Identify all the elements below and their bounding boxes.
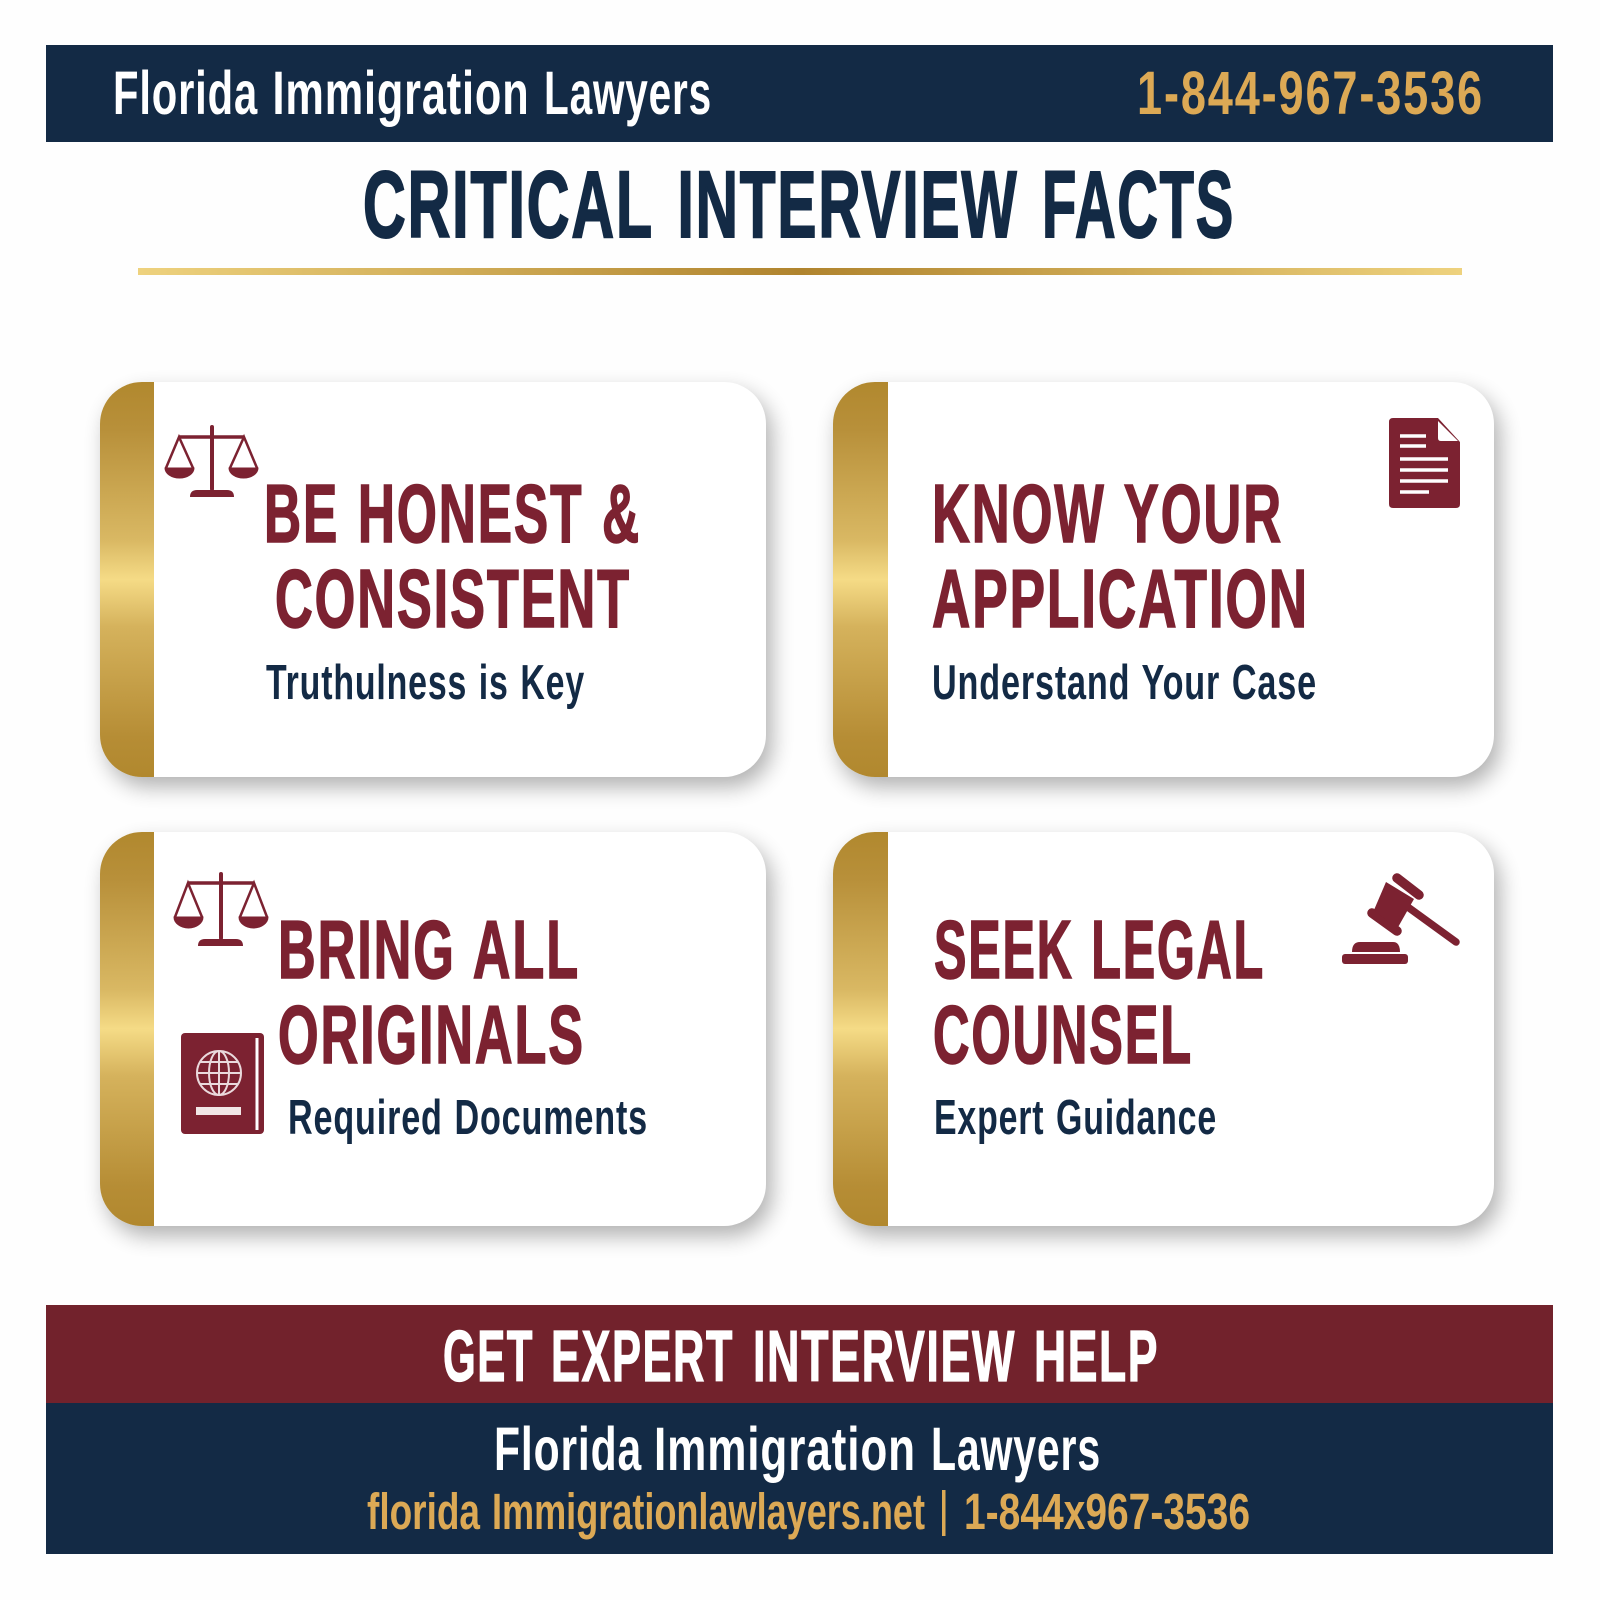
heading line 2: COUNSEL xyxy=(933,988,1193,1081)
footer website xyxy=(367,1483,925,1540)
heading: SEEK LEGAL xyxy=(934,903,1265,996)
footer phone: 1-844x967-3536 xyxy=(964,1483,1250,1540)
heading: KNOW YOUR xyxy=(932,467,1283,560)
header firm name: Lawyers xyxy=(544,59,712,127)
icon: gavel xyxy=(1342,878,1456,964)
panel: know your application xyxy=(833,382,1500,787)
footer bar xyxy=(46,1403,1553,1554)
header firm name: Immigration xyxy=(272,59,530,127)
icon: scales of justice xyxy=(174,872,268,946)
icon: document xyxy=(1389,418,1460,508)
panel: be honest and consistent xyxy=(100,382,772,787)
footer firm name xyxy=(494,1415,1101,1483)
footer firm name: Florida xyxy=(494,1415,642,1483)
icon: scales of justice xyxy=(165,425,258,497)
heading line 2: APPLICATION xyxy=(932,552,1309,645)
icon: passport xyxy=(181,1033,264,1134)
heading: BRING ALL xyxy=(278,903,580,996)
heading line 2: CONSISTENT xyxy=(275,552,631,645)
heading: BE HONEST & xyxy=(264,467,641,560)
header firm name: Florida xyxy=(113,59,258,127)
footer website: florida xyxy=(367,1483,480,1540)
header bar xyxy=(46,45,1553,142)
title: INTERVIEW xyxy=(678,152,1018,258)
panel: bring all originals xyxy=(100,832,772,1236)
heading line 2: ORIGINALS xyxy=(278,988,585,1081)
footer website: Immigrationlawlayers.net xyxy=(492,1483,925,1540)
panel: seek legal counsel xyxy=(833,832,1500,1236)
footer firm name: Lawyers xyxy=(931,1415,1101,1483)
title: CRITICAL xyxy=(363,152,654,258)
title xyxy=(363,152,1235,258)
subheading: Truthulness is Key xyxy=(266,656,585,710)
header phone number: 1-844-967-3536 xyxy=(1137,59,1484,127)
title gold rule xyxy=(138,268,1462,275)
footer divider xyxy=(942,1490,946,1536)
call to action text: INTERVIEW xyxy=(753,1317,1016,1397)
subheading: Expert Guidance xyxy=(934,1091,1217,1145)
call to action band xyxy=(46,1305,1553,1403)
call to action text xyxy=(443,1317,1159,1397)
header firm name xyxy=(113,59,712,127)
footer firm name: Immigration xyxy=(654,1415,916,1483)
call to action text: GET xyxy=(443,1317,534,1397)
subheading: Required Documents xyxy=(288,1091,648,1145)
call to action text: EXPERT xyxy=(551,1317,734,1397)
subheading: Understand Your Case xyxy=(932,656,1317,710)
call to action text: HELP xyxy=(1034,1317,1159,1397)
title: FACTS xyxy=(1042,152,1235,258)
